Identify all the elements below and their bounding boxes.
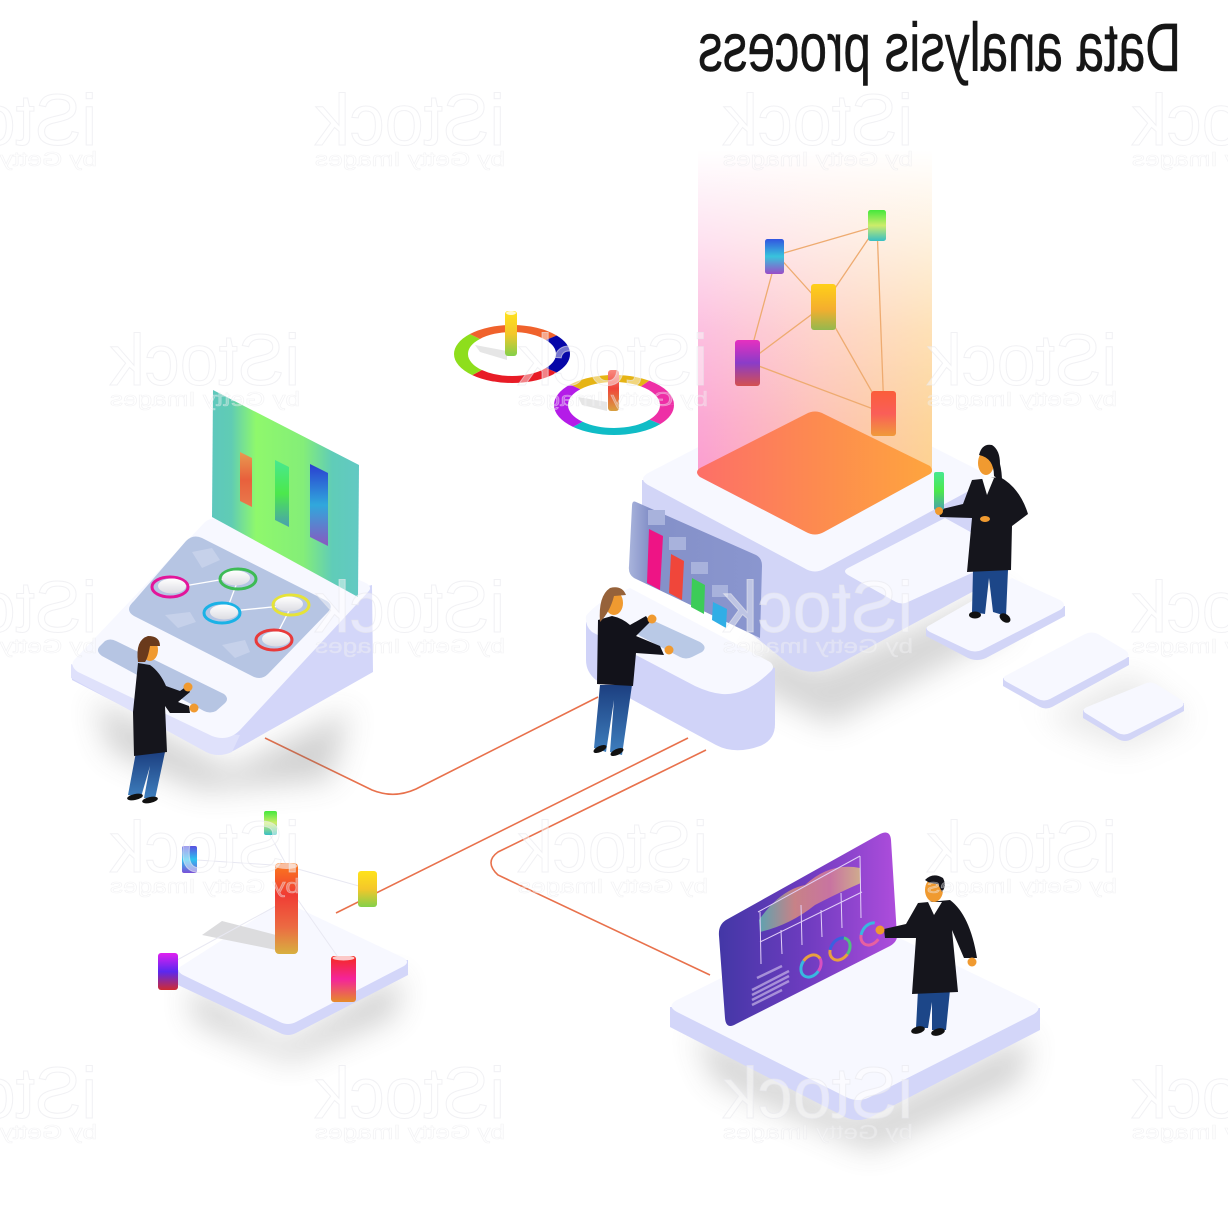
watermarks: iStock xyxy=(926,321,1117,401)
network panel xyxy=(129,537,331,678)
hand xyxy=(980,516,990,522)
cylinder shadow xyxy=(202,921,276,950)
watermarks: by Getty Images xyxy=(315,149,505,171)
screen bars xyxy=(240,452,252,507)
terminal left lip xyxy=(71,664,240,755)
watermarks: by Getty Images xyxy=(518,389,708,411)
desk top xyxy=(586,588,773,694)
platform top xyxy=(672,918,1038,1100)
legs xyxy=(916,990,950,1030)
network links xyxy=(184,579,292,640)
watermarks: by Getty Images xyxy=(927,876,1117,898)
hair xyxy=(925,875,945,892)
platform side xyxy=(670,1007,1040,1120)
ring chart: left xyxy=(461,311,563,380)
teal bar screen xyxy=(212,390,359,597)
shirt xyxy=(928,902,942,915)
ring cylinder xyxy=(608,370,619,411)
platform side xyxy=(178,960,408,1035)
step pad 2 xyxy=(1003,632,1129,708)
purple chart board xyxy=(719,832,897,1026)
person: presenter xyxy=(876,875,977,1037)
machine shadow xyxy=(750,590,1010,725)
watermarks: iStock xyxy=(926,808,1117,888)
legs xyxy=(594,685,632,755)
legs xyxy=(972,570,1008,616)
platform top xyxy=(178,904,407,1024)
watermarks: iStock xyxy=(517,808,708,888)
chart axes xyxy=(758,856,862,964)
station: presentation platform xyxy=(670,832,1040,1150)
watermarks: by Getty Images xyxy=(518,876,708,898)
touchpad xyxy=(637,620,705,658)
watermarks: by Getty Images xyxy=(110,389,300,411)
watermarks: iStock xyxy=(722,568,913,648)
watermarks: iStock xyxy=(109,808,300,888)
network nodes xyxy=(735,210,896,436)
platform shadow xyxy=(695,1030,1030,1150)
head xyxy=(605,591,623,615)
hair xyxy=(137,636,160,662)
terminal right face xyxy=(72,585,373,754)
torso xyxy=(597,616,664,686)
light beam xyxy=(698,150,932,472)
watermarks: by Getty Images xyxy=(723,1122,913,1144)
person: terminal operator xyxy=(127,636,198,805)
title: Data analysis process xyxy=(698,9,1181,86)
beam base xyxy=(697,412,932,534)
machine top xyxy=(643,390,984,572)
link lines xyxy=(168,835,366,965)
terminal top xyxy=(72,518,370,738)
watermarks: iStock xyxy=(314,1054,505,1134)
watermarks: iStock xyxy=(517,321,708,401)
watermarks: by Getty Images xyxy=(110,876,300,898)
network lines xyxy=(748,226,884,413)
watermarks: iStock xyxy=(722,1054,913,1134)
head xyxy=(142,639,158,661)
station: cylinder platform xyxy=(158,811,408,1060)
ring shadow xyxy=(578,397,607,411)
hair xyxy=(979,445,1002,482)
station: left terminal xyxy=(71,390,373,790)
cylinders xyxy=(158,811,377,1002)
ring cylinder xyxy=(505,311,517,356)
watermarks: by Getty Images xyxy=(315,636,505,658)
person: console operator xyxy=(592,587,674,758)
watermarks: iStock xyxy=(314,568,505,648)
machine body xyxy=(642,480,985,672)
head xyxy=(978,451,994,475)
terminal shadow xyxy=(95,700,350,790)
bar chart xyxy=(647,510,728,628)
legs xyxy=(128,752,165,799)
watermarks: iStock xyxy=(109,321,300,401)
hands xyxy=(648,614,656,624)
coat xyxy=(133,663,190,756)
watermarks: iStock xyxy=(722,81,913,161)
large step xyxy=(845,518,985,618)
person pad xyxy=(926,578,1065,660)
area chart xyxy=(759,867,861,932)
panel labels xyxy=(165,548,250,658)
platform shadow xyxy=(190,975,400,1060)
dashboard screen xyxy=(629,502,762,638)
test tube xyxy=(934,472,944,510)
hair xyxy=(600,587,626,622)
watermarks: by Getty Images xyxy=(723,149,913,171)
step pads xyxy=(1003,632,1190,750)
connector lines xyxy=(265,697,710,975)
desk body xyxy=(586,622,775,750)
text block xyxy=(752,966,789,1005)
keypad xyxy=(98,640,227,712)
station: data beam machine xyxy=(629,150,1065,725)
ring chart: right xyxy=(561,370,667,432)
coat xyxy=(938,477,1028,572)
watermarks: by Getty Images xyxy=(315,1122,505,1144)
watermarks: iStock xyxy=(314,81,505,161)
person: woman with test tube xyxy=(934,445,1028,625)
console desk xyxy=(586,588,775,750)
step pad 3 xyxy=(1083,682,1184,741)
watermarks: by Getty Images xyxy=(723,636,913,658)
watermarks: by Getty Images xyxy=(927,389,1117,411)
donut charts xyxy=(797,919,885,981)
head xyxy=(925,878,943,902)
hands xyxy=(184,682,192,692)
hands xyxy=(876,926,884,934)
coat xyxy=(884,900,977,994)
collar xyxy=(982,478,994,495)
network nodes xyxy=(152,569,309,650)
shadow xyxy=(1010,672,1190,750)
ring shadow xyxy=(475,345,507,360)
